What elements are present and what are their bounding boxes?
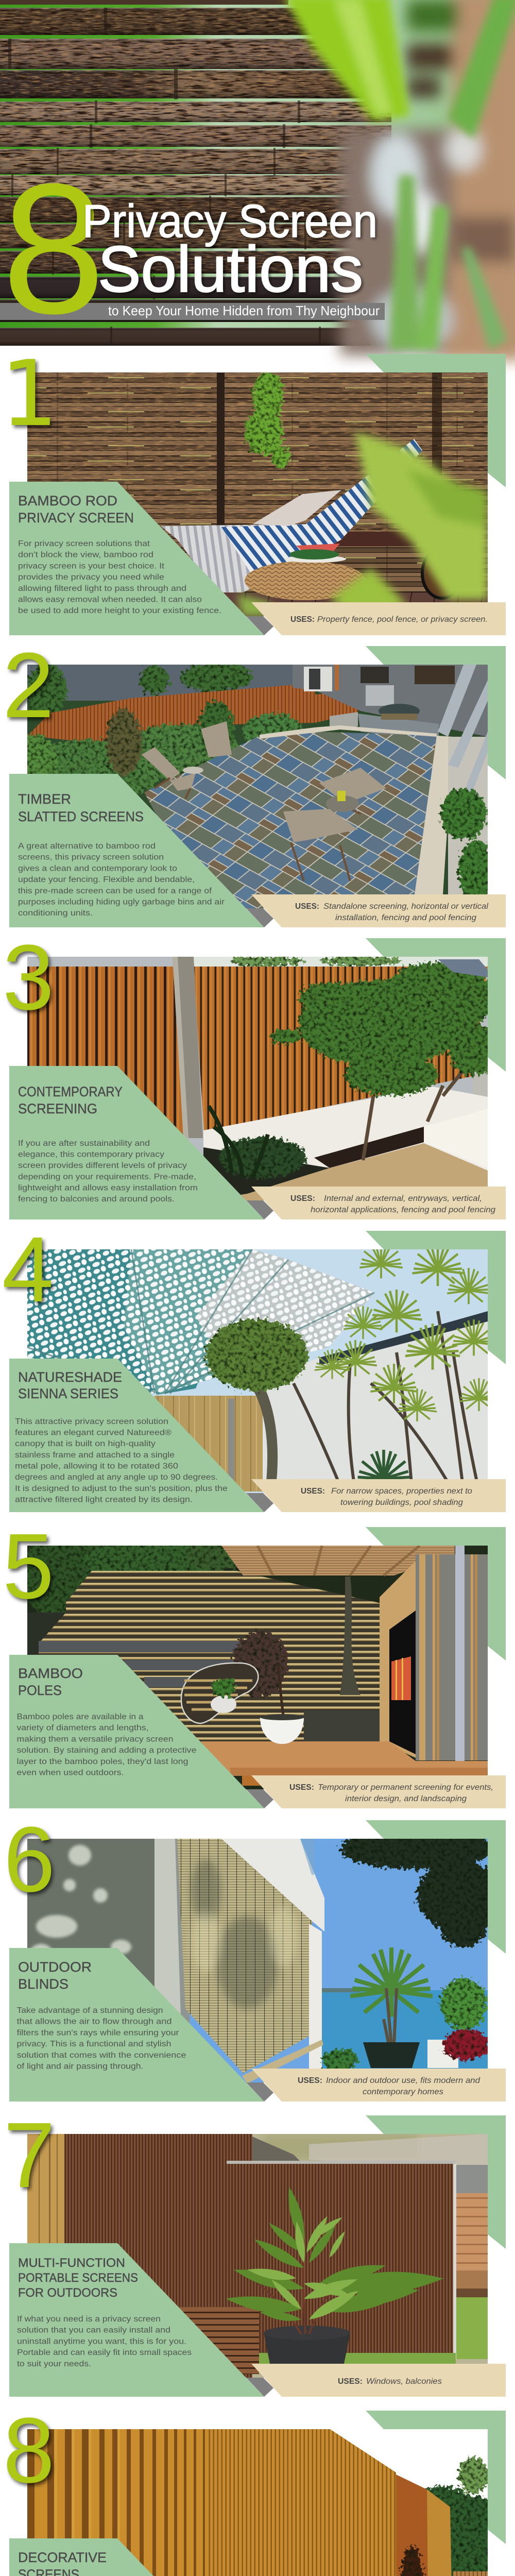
panel 5: bamboo poles <box>3 1515 506 1808</box>
tan uses band <box>251 894 506 927</box>
description: making them a versatile privacy screen <box>16 1735 173 1743</box>
description: layer to the bamboo poles, they'd last long <box>16 1757 188 1766</box>
green text block <box>9 2538 264 2576</box>
number 7: 7 <box>4 2104 55 2207</box>
heading: MULTI-FUNCTION <box>18 2256 125 2270</box>
uses: contemporary homes <box>363 2088 443 2096</box>
heading <box>18 1666 83 1698</box>
description: filters the sun's rays while ensuring your <box>16 2028 179 2037</box>
uses <box>290 1194 495 1214</box>
description: fencing to balconies and around pools. <box>18 1195 175 1204</box>
green text block <box>9 482 264 635</box>
uses <box>338 2377 442 2386</box>
uses: USES: <box>290 615 315 624</box>
panel 7: multi-function portable screens <box>4 2104 506 2397</box>
heading <box>18 1959 92 1992</box>
grey accent <box>246 616 273 635</box>
description: even when used outdoors. <box>16 1768 124 1777</box>
photo: bamboo blind and sea view <box>27 1828 500 2083</box>
photo: horizontal bamboo pole wall <box>21 1530 488 1789</box>
tan uses band <box>251 1187 506 1219</box>
heading: NATURESHADE <box>18 1369 122 1385</box>
description <box>17 2315 192 2368</box>
uses: Windows, balconies <box>366 2377 442 2386</box>
heading <box>18 2256 138 2300</box>
description: solution that comes with the convenience <box>16 2051 186 2060</box>
tan uses band <box>251 1775 506 1808</box>
heading: POLES <box>18 1683 62 1698</box>
description: lightweight and allows easy installation from <box>18 1184 198 1193</box>
description: privacy. This is a functional and stylish <box>16 2040 171 2048</box>
green text block <box>9 1948 264 2102</box>
hero title line 1: Privacy Screen <box>82 196 377 247</box>
number 1: 1 <box>1 341 58 447</box>
heading: OUTDOOR <box>18 1959 92 1975</box>
green top-right corner <box>366 1527 506 1660</box>
panel 6: outdoor blinds <box>4 1808 506 2102</box>
uses <box>295 902 489 922</box>
description: this pre-made screen can be used for a range of <box>18 887 212 895</box>
description: update your fencing. Flexible and bendable, <box>18 875 195 884</box>
panel 4: natureshade sienna series <box>2 1218 506 1512</box>
heading: SLATTED SCREENS <box>18 809 144 824</box>
description: solution that you can easily install and <box>17 2326 170 2335</box>
green top-right corner <box>366 1820 506 1954</box>
description: of light and air passing through. <box>16 2062 143 2071</box>
hero subtitle: to Keep Your Home Hidden from Thy Neighbour <box>108 303 380 318</box>
number 8: 8 <box>3 2399 55 2502</box>
description: A great alternative to bamboo rod <box>18 842 156 851</box>
description <box>16 1713 197 1777</box>
green text block <box>9 1655 264 1808</box>
tan uses band <box>251 602 506 635</box>
description <box>15 1417 228 1504</box>
green top-right corner <box>366 2411 506 2544</box>
uses: USES: <box>298 2076 322 2085</box>
uses: USES: <box>301 1487 325 1496</box>
description: provides the privacy you need while <box>18 573 164 582</box>
grey accent <box>246 2378 273 2397</box>
description: This attractive privacy screen solution <box>15 1417 168 1426</box>
number 5: 5 <box>3 1515 54 1618</box>
heading <box>18 2550 107 2576</box>
heading: FOR OUTDOORS <box>18 2286 117 2300</box>
description: be used to add more height to your existing fence. <box>18 606 221 615</box>
description: that allows the air to flow through and <box>16 2018 172 2026</box>
uses: USES: <box>295 902 319 911</box>
heading: SIENNA SERIES <box>18 1386 118 1401</box>
description: features an elegant curved Natureed® <box>15 1429 172 1437</box>
description <box>18 842 225 918</box>
description: canopy that is built on high-quality <box>15 1439 156 1448</box>
heading: PORTABLE SCREENS <box>18 2271 138 2285</box>
description: If what you need is a privacy screen <box>17 2315 161 2324</box>
description: allows easy removal when needed. It can also <box>18 596 202 604</box>
description: screen provides different levels of privacy <box>18 1161 187 1170</box>
heading: DECORATIVE <box>18 2550 107 2565</box>
description: uninstall anytime you want, this is for you. <box>17 2337 186 2346</box>
grey accent <box>246 1789 273 1808</box>
description: metal pole, allowing it to be rotated 360 <box>15 1462 178 1471</box>
grey accent <box>246 1493 273 1512</box>
panel 3: contemporary screening <box>3 926 506 1219</box>
uses: For narrow spaces, properties next to <box>331 1487 472 1496</box>
description: conditioning units. <box>18 909 93 918</box>
grey accent <box>246 908 273 927</box>
heading: BAMBOO ROD <box>18 493 117 509</box>
description: allowing filtered light to pass through and <box>18 584 186 593</box>
uses <box>289 1783 493 1803</box>
description: gives a clean and contemporary look to <box>18 864 177 873</box>
description: attractive filtered light created by its design. <box>15 1496 193 1504</box>
number 2: 2 <box>3 634 54 737</box>
heading <box>18 791 144 824</box>
photo: courtyard with slate paving <box>15 663 494 912</box>
green top-right corner <box>366 938 506 1072</box>
green text block <box>9 1066 264 1219</box>
heading: BAMBOO <box>18 1666 83 1681</box>
tan uses band <box>251 2069 506 2102</box>
uses: towering buildings, pool shading <box>340 1498 463 1507</box>
green top-right corner <box>366 2115 506 2249</box>
green top-right corner <box>366 354 506 487</box>
green text block <box>9 774 264 927</box>
description: depending on your requirements. Pre-made, <box>18 1173 196 1181</box>
uses: Standalone screening, horizontal or vertical <box>323 902 489 911</box>
uses: USES: <box>289 1783 314 1792</box>
uses: installation, fencing and pool fencing <box>335 913 476 922</box>
number 6: 6 <box>4 1808 55 1911</box>
photo: timber slat wall with tree <box>27 956 500 1200</box>
grey accent <box>246 1200 273 1219</box>
uses: Internal and external, entryways, vertical, <box>324 1194 482 1203</box>
hero photo: bamboo rods and blurred leaves <box>0 0 515 361</box>
uses <box>301 1487 472 1507</box>
subtitle band <box>0 303 385 320</box>
uses: interior design, and landscaping <box>345 1794 467 1803</box>
panel 1: bamboo rod privacy screen <box>1 341 506 635</box>
description <box>16 2006 186 2071</box>
green text block <box>9 2243 264 2397</box>
description: screens, this privacy screen solution <box>18 853 164 862</box>
photo: bamboo fence with lounger <box>27 371 488 620</box>
heading: PRIVACY SCREEN <box>18 510 134 526</box>
panel 2: timber slatted screens <box>3 634 506 927</box>
heading: CONTEMPORARY <box>18 1084 123 1099</box>
heading <box>18 1084 123 1116</box>
description: For privacy screen solutions that <box>18 539 150 548</box>
description: stainless frame and attached to a single <box>15 1451 175 1460</box>
description: If you are after sustainability and <box>18 1139 150 1148</box>
heading: TIMBER <box>18 791 71 807</box>
description: purposes including hiding ugly garbage bins and air <box>18 897 225 907</box>
uses: Property fence, pool fence, or privacy screen. <box>317 615 488 624</box>
photo: brush screens with potted plant <box>27 2134 489 2378</box>
green text block <box>9 1359 264 1512</box>
description: degrees and angled at any angle up to 90 degrees. <box>15 1473 218 1482</box>
tan uses band <box>251 2364 506 2397</box>
uses: horizontal applications, fencing and pool fencing <box>311 1206 495 1214</box>
heading <box>18 1369 122 1401</box>
heading <box>18 493 134 526</box>
hero banner <box>0 0 515 361</box>
description: solution. By staining and adding a protective <box>16 1746 197 1755</box>
uses: Indoor and outdoor use, fits modern and <box>326 2076 480 2085</box>
number 4: 4 <box>2 1218 54 1321</box>
green top-right corner <box>366 646 506 779</box>
big number 8: 8 <box>2 145 105 352</box>
panel 8: decorative screens <box>3 2399 506 2576</box>
description: to suit your needs. <box>17 2360 91 2368</box>
uses <box>298 2076 480 2096</box>
description: Portable and can easily fit into small spaces <box>17 2348 192 2357</box>
heading: SCREENING <box>18 1101 97 1116</box>
description: elegance, this contemporary privacy <box>18 1150 164 1159</box>
heading: BLINDS <box>18 1976 68 1992</box>
description <box>18 539 221 615</box>
photo: perforated canopy and palms <box>27 1242 499 1496</box>
uses: USES: <box>338 2377 363 2386</box>
description: It is designed to adjust to the sun's position, plus the <box>15 1484 228 1493</box>
hero title line 2: Solutions <box>98 233 363 306</box>
tan uses band <box>251 1479 506 1512</box>
description: variety of diameters and lengths, <box>16 1724 148 1733</box>
grey accent <box>246 2082 273 2102</box>
photo: golden slat wall with corten panel <box>27 2429 505 2576</box>
description: privacy screen is your best choice. It <box>18 562 165 570</box>
uses: USES: <box>290 1194 315 1203</box>
number 3: 3 <box>3 926 54 1029</box>
description <box>18 1139 198 1204</box>
description: Take advantage of a stunning design <box>16 2006 163 2015</box>
green top-right corner <box>366 1231 506 1364</box>
description: Bamboo poles are available in a <box>16 1713 144 1721</box>
uses: Temporary or permanent screening for events, <box>318 1783 493 1792</box>
description: don't block the view, bamboo rod <box>18 551 153 560</box>
